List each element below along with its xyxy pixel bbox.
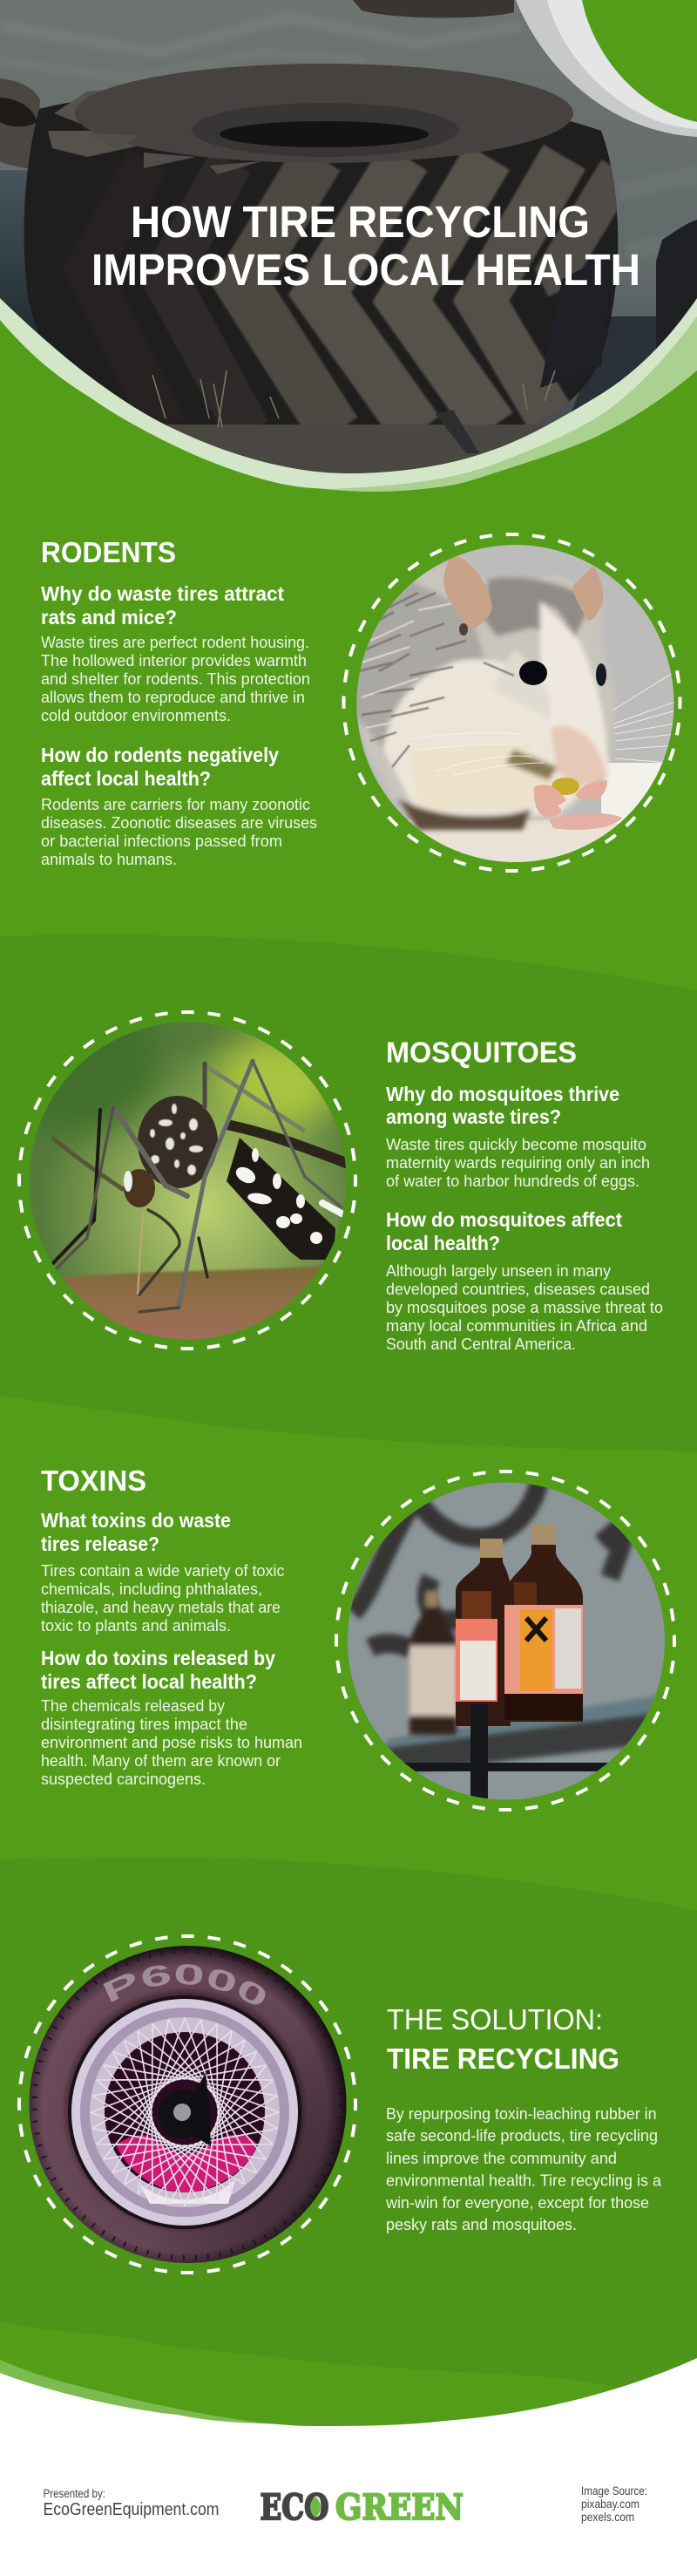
wheel interior <box>105 2032 265 2192</box>
text: what toxins <box>41 1561 284 1635</box>
subheading: what toxins: What toxins do waste <box>41 1509 231 1532</box>
heading: solution: THE SOLUTION: <box>387 2003 603 2036</box>
photo: mosquito <box>30 1022 347 1339</box>
right ear <box>572 566 603 621</box>
footer: image sources: pixabay.com <box>581 2498 639 2511</box>
blurred graffiti <box>353 1478 632 1649</box>
text: what toxins: Tires contain a wide variety of toxic <box>41 1561 284 1580</box>
text: solution: lines improve the community and <box>386 2149 617 2167</box>
brand lettering: P6000 <box>103 1964 265 2005</box>
photo: sand texture <box>10 28 512 54</box>
abdomen spots <box>233 1148 322 1244</box>
panel: rodents <box>41 536 317 868</box>
heading: solution: TIRE RECYCLING <box>387 2042 619 2075</box>
right bottle glint <box>514 1582 537 1605</box>
head <box>124 1169 155 1207</box>
middle bottle white label <box>460 1641 496 1700</box>
skin <box>62 1266 321 1339</box>
subheading: how rodents: How do rodents negatively <box>41 744 279 766</box>
text: how toxins: suspected carcinogens. <box>41 1770 206 1788</box>
text: how rodents <box>41 795 317 868</box>
right bottle white panel <box>555 1608 581 1689</box>
header band: pale crescent <box>0 298 697 489</box>
rear bar <box>227 1125 348 1164</box>
antenna <box>52 1138 124 1190</box>
shelf top <box>388 1696 658 1748</box>
right bottle <box>504 1543 583 1722</box>
photo: right background tire <box>656 220 697 349</box>
photo: chemical bottles <box>344 1478 671 1805</box>
photo: left blue-grey ground <box>0 170 39 344</box>
rim seam <box>68 1995 301 2229</box>
header top-right corner: light arc <box>547 0 697 129</box>
text: how toxins: The chemicals released by <box>41 1696 226 1715</box>
text: what toxins: chemicals, including phthalates, <box>41 1580 262 1598</box>
text: how toxins <box>41 1696 302 1788</box>
subheading: how rodents: affect local health? <box>41 767 211 790</box>
text: why mosquitoes: maternity wards requiring only an inch <box>386 1153 650 1172</box>
text: why mosquitoes <box>386 1135 650 1190</box>
photo: tire body <box>24 88 618 427</box>
ear base shadow <box>459 623 468 636</box>
text: how mosquitoes: developed countries, diseases caused <box>386 1280 650 1298</box>
bright right surface <box>601 763 662 824</box>
photo: left tire opening <box>0 98 37 126</box>
right bottle label <box>504 1605 583 1694</box>
text: solution: By repurposing toxin-leaching rubber in <box>386 2104 657 2123</box>
text: what toxins: thiazole, and heavy metals that are <box>41 1598 281 1616</box>
text: how rodents: or bacterial infections passed from <box>41 832 282 850</box>
footer: image sources <box>581 2484 647 2524</box>
rat body and fur <box>348 558 614 830</box>
proboscis <box>138 1212 143 1295</box>
text: solution <box>385 2104 662 2233</box>
heading: solution <box>387 2003 619 2075</box>
footer: presented by: Presented by: <box>44 2487 105 2500</box>
white fur streaks <box>361 602 451 729</box>
text: why rodents <box>41 633 310 724</box>
header top-right corner: green circle <box>582 0 697 122</box>
dashed ring: tire <box>19 1936 355 2273</box>
amber lower liquid <box>504 1694 583 1720</box>
subheading: what toxins <box>41 1509 231 1555</box>
text: why mosquitoes: Waste tires quickly become mosquito <box>386 1135 646 1153</box>
legs <box>52 1061 342 1312</box>
text: why rodents: cold outdoor environments. <box>41 706 231 724</box>
logo: Eco Green: ECO <box>260 2487 329 2528</box>
sidewall brand arc <box>109 1984 261 2010</box>
shelf post <box>470 1704 488 1800</box>
heading: mosquitoes: MOSQUITOES <box>386 1036 577 1069</box>
text: solution: win-win for everyone, except for those <box>385 2193 649 2212</box>
text: what toxins: toxic to plants and animals. <box>41 1616 231 1635</box>
text: solution: safe second-life products, tire recycling <box>386 2126 658 2144</box>
middle bottle liquid glint <box>462 1591 491 1619</box>
right bottle cork <box>531 1524 556 1545</box>
text: why mosquitoes: of water to harbor hundreds of eggs. <box>386 1172 639 1190</box>
food <box>552 778 579 795</box>
text: how rodents: Rodents are carriers for many zoonotic <box>41 795 310 813</box>
photo: plastic scrap <box>436 410 479 453</box>
subheading: how mosquitoes: How do mosquitoes affect <box>386 1208 622 1231</box>
heading: toxins: TOXINS <box>41 1465 146 1497</box>
spokes <box>86 2014 283 2211</box>
photo: tire top ring <box>192 103 458 157</box>
middle bottle label <box>456 1619 497 1702</box>
header top-right corner: grey arc <box>516 0 697 137</box>
hazard cross <box>526 1618 546 1641</box>
thorax spots <box>145 1104 203 1179</box>
abdomen <box>227 1138 335 1260</box>
title <box>91 197 640 295</box>
fur streaks <box>359 593 514 767</box>
photo: dark tire side on right <box>540 267 603 388</box>
far leg <box>205 1065 305 1132</box>
tread notches <box>35 1951 342 2258</box>
text: how mosquitoes <box>386 1261 663 1353</box>
title: IMPROVES LOCAL HEALTH <box>91 245 640 295</box>
rim outer <box>71 1999 298 2226</box>
subheading: why mosquitoes: Why do mosquitoes thrive <box>386 1083 619 1105</box>
text: how mosquitoes: Although largely unseen in many <box>386 1261 612 1280</box>
text: how rodents: diseases. Zoonotic diseases are viruses <box>41 813 317 832</box>
panel: toxins <box>41 1465 302 1788</box>
photo: tire top wall <box>75 64 573 163</box>
eye <box>519 661 547 685</box>
logo: Eco Green <box>260 2487 464 2528</box>
footer: image sources: Image Source: <box>581 2484 647 2498</box>
header band: mid green crescent <box>261 288 697 492</box>
text: solution: environmental health. Tire recycling is a <box>386 2171 662 2190</box>
hub cap <box>173 2104 191 2121</box>
tire rubber <box>30 1946 347 2263</box>
subheading: how toxins: tires affect local health? <box>41 1670 257 1693</box>
foot <box>549 813 622 830</box>
subheading: why mosquitoes: among waste tires? <box>386 1105 561 1128</box>
text: why rodents: and shelter for rodents. This protection <box>41 669 310 688</box>
subheading: why mosquitoes <box>386 1083 619 1128</box>
photo: tire hole <box>220 121 429 147</box>
far eye <box>596 663 606 686</box>
text: how toxins: environment and pose risks to human <box>41 1733 302 1751</box>
knock-off spinner <box>183 2073 211 2146</box>
hub <box>159 2090 207 2138</box>
paws <box>534 780 607 818</box>
left ear <box>443 556 492 629</box>
text: how rodents: animals to humans. <box>41 850 177 868</box>
subheading: why rodents: rats and mice? <box>41 606 177 629</box>
dashed ring: toxins <box>336 1472 674 1810</box>
rubber shading <box>30 1946 347 2263</box>
footer: image sources: pexels.com <box>581 2511 634 2524</box>
photo: spoked tire <box>30 1946 347 2263</box>
icon: leaf <box>310 2497 321 2518</box>
whiskers <box>409 671 675 776</box>
title: HOW TIRE RECYCLING <box>131 197 590 247</box>
yellow glow <box>213 1033 344 1129</box>
text: why rodents: The hollowed interior provides warmth <box>41 651 307 669</box>
text: how toxins: health. Many of them are known or <box>41 1751 281 1770</box>
shelf under ledge <box>388 1704 658 1774</box>
text: how mosquitoes: by mosquitoes pose a massive threat to <box>386 1298 663 1316</box>
photo: tire left tread blocks <box>48 90 138 157</box>
text: how toxins: disintegrating tires impact the <box>41 1715 247 1733</box>
wave band: lower <box>206 1857 697 2388</box>
photo: left background tire <box>0 78 40 170</box>
subheading: how mosquitoes: local health? <box>386 1232 500 1254</box>
left bottle <box>409 1591 457 1735</box>
head spots <box>124 1171 132 1192</box>
subheading: how toxins: How do toxins released by <box>41 1647 275 1669</box>
text: why rodents: Waste tires are perfect rodent housing. <box>41 633 309 651</box>
photo: lugs shoulder highlights <box>87 133 261 174</box>
subheading: how toxins <box>41 1647 275 1693</box>
footer: presented by <box>44 2487 220 2519</box>
photo: dark ground on right <box>572 316 684 411</box>
header tire photograph <box>0 0 697 488</box>
middle bottle cap <box>480 1539 503 1558</box>
top-left dark blur <box>38 1026 173 1147</box>
photo: dry weeds <box>152 370 555 427</box>
dashed ring: rat <box>343 534 680 871</box>
text: solution: pesky rats and mosquitoes. <box>386 2215 577 2233</box>
heading: rodents: RODENTS <box>41 536 176 568</box>
thorax <box>138 1096 218 1188</box>
footer: presented by: EcoGreenEquipment.com <box>44 2500 220 2519</box>
subheading: how rodents <box>41 744 279 790</box>
floor <box>407 819 624 862</box>
text: how mosquitoes: South and Central America. <box>386 1335 576 1353</box>
rim channel <box>80 2008 289 2217</box>
text: why rodents: allows them to reproduce and thrive in <box>41 688 305 706</box>
subheading: what toxins: tires release? <box>41 1533 159 1555</box>
photo: lower ground <box>166 425 549 473</box>
dashed ring: mosquito <box>19 1012 355 1349</box>
white lower patch <box>139 2179 235 2204</box>
shelf rail <box>401 1763 632 1771</box>
photo: background tire top <box>353 0 514 17</box>
panel: solution <box>385 2003 662 2233</box>
subheading: why rodents <box>41 582 284 629</box>
orange hazard panel <box>520 1609 552 1691</box>
photo: tread lugs <box>87 157 619 432</box>
subheading: how mosquitoes <box>386 1208 622 1254</box>
subheading: why rodents: Why do waste tires attract <box>41 582 284 605</box>
wave band: upper <box>0 935 697 1451</box>
pink backdrop <box>116 2135 257 2192</box>
logo: Eco Green: GREEN <box>335 2487 464 2528</box>
panel: mosquitoes <box>386 1036 663 1353</box>
photo: rat <box>348 540 680 867</box>
spoke ring <box>90 2017 280 2207</box>
middle bottle <box>456 1552 511 1726</box>
text: how mosquitoes: many local communities in Africa and <box>386 1316 647 1335</box>
